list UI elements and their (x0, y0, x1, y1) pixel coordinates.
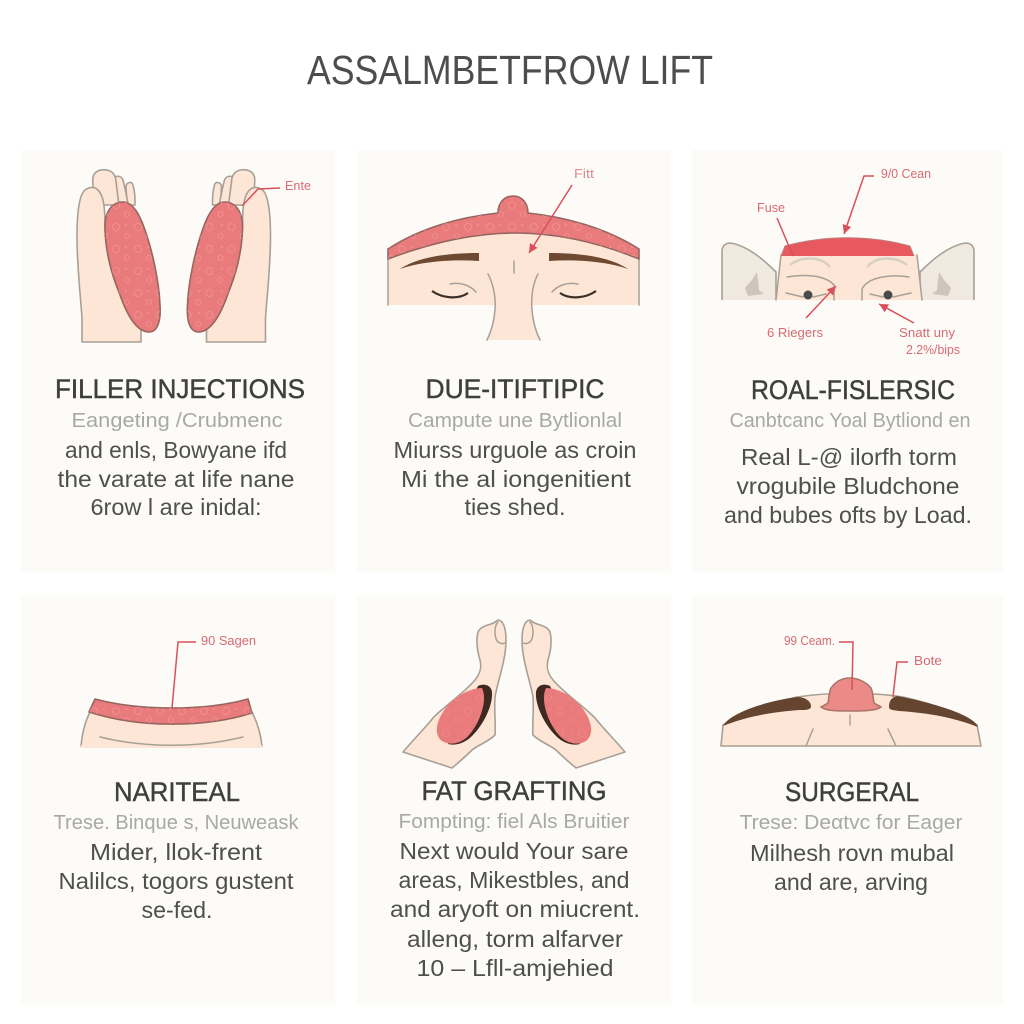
callout: Bote: Bote (914, 653, 942, 668)
callout: 99 Ceam.: 99 Ceam. (784, 633, 835, 648)
subtitle: Canbtcanc Yoal Bytliond en (730, 410, 970, 432)
panel: fat grafting (357, 595, 671, 1005)
body text (58, 437, 294, 520)
heading: SURGERAL (785, 777, 919, 807)
panel: due-itiftipic (357, 150, 671, 572)
heading: FAT GRAFTING (422, 776, 606, 806)
body text: se-fed. (142, 897, 212, 923)
callout: Bote (893, 653, 942, 697)
subtitle: Eangeting /Crubmenc (72, 410, 282, 432)
body text: vrogubile Bludchone (736, 473, 960, 499)
callout: Fitt: Fitt (574, 166, 594, 181)
body text: alleng, torm alfarver (407, 926, 623, 952)
body text: Mi the al iongenitient (401, 466, 632, 492)
callout: Fuse (757, 200, 793, 256)
body text: Milhesh rovn mubal (750, 840, 954, 866)
body text: Miurss urguole as croin (394, 437, 636, 463)
subtitle: Fompting: fiel Als Bruitier (398, 811, 630, 833)
body text: ties shed. (464, 494, 566, 520)
callout: 90 Cean: 9/0 Cean (881, 166, 931, 181)
callout: Ente: Ente (285, 178, 311, 193)
body text: and bubes ofts by Load. (724, 502, 972, 528)
icon: face with ears and brow band (722, 238, 974, 300)
body text (724, 444, 972, 528)
body text: 6row l are inidal: (90, 494, 262, 520)
callout: 90 Cean (844, 166, 931, 234)
panel: surgeral (692, 595, 1003, 1005)
callout: 99 Ceam. (784, 633, 853, 690)
heading: FILLER INJECTIONS (55, 374, 305, 404)
panel: filler injections (21, 150, 335, 572)
body text (58, 839, 294, 923)
heading: NARITEAL (114, 777, 240, 807)
body text (390, 838, 640, 981)
callout: 6 Riegers: 6 Riegers (767, 325, 823, 340)
heading: ROAL-FISLERSIC (751, 375, 955, 405)
body text (750, 840, 954, 895)
icon: arms with fat deposits (403, 620, 625, 768)
body text: and aryoft on miucrent. (390, 896, 640, 922)
icon: brow ridge with implant (721, 678, 981, 746)
title: ASSALMBETFROW LIFT (307, 47, 713, 93)
callout: 90 Sagen (172, 633, 256, 708)
body text: and enls, Bowyane ifd (65, 437, 287, 463)
callout: 90 Sagen: 90 Sagen (201, 633, 256, 648)
callout: Fitt (529, 166, 594, 253)
panel: roal-fislersic (692, 150, 1003, 572)
icon: forehead with filler band (388, 196, 639, 340)
heading: DUE-ITIFTIPIC (426, 374, 604, 404)
body text: 10 – Lfll-amjehied (416, 955, 614, 981)
icon: hands holding filler (77, 170, 270, 342)
body text: Nalilcs, togors gustent (58, 868, 294, 894)
callout: Snatt uny: Snatt uny (899, 325, 955, 340)
callout: Snatt uny: 2.2%/bips (906, 342, 960, 357)
body text: Mider, llok-frent (90, 839, 263, 865)
body text: Real L-@ ilorfh torm (741, 444, 957, 470)
callout: Fuse: Fuse (757, 200, 785, 215)
subtitle: Trese: Deαtvc for Eager (740, 812, 963, 834)
subtitle: Trese. Binque s, Neuweask (54, 812, 299, 834)
callout: Ente (242, 178, 311, 206)
panel: nariteal (21, 595, 335, 1005)
callout: 6 Riegers (767, 286, 836, 340)
body text: areas, Mikestbles, and (398, 867, 630, 893)
subtitle: Campute une Bytlionlal (408, 410, 622, 432)
body text: Next would Your sare (400, 838, 628, 864)
icon: brow band (81, 699, 262, 748)
body text: the varate at life nane (58, 466, 294, 492)
body text (394, 437, 636, 520)
body text: and are, arving (774, 869, 928, 895)
callout: Snatt uny (879, 304, 960, 357)
